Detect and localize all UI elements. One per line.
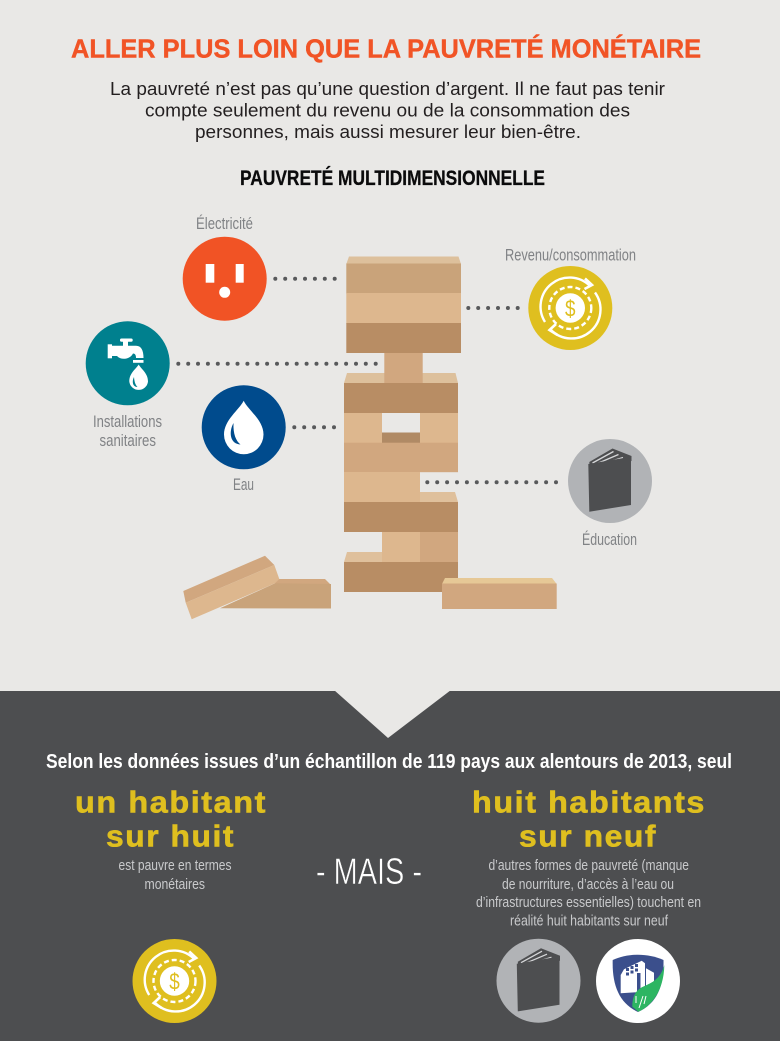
fallen blocks left [183,556,331,619]
icon: income bottom [132,939,216,1023]
icon: income: $ [565,296,576,322]
label: sanitation: Installations [93,413,162,431]
description: other poverty forms: réalité huit habitants sur neuf [510,912,669,930]
dotted connectors [176,277,558,484]
block tower [344,256,461,592]
big stat: eight in nine: sur neuf [519,818,657,854]
intro text: personnes, mais aussi mesurer leur bien-être. [195,122,581,142]
icon: income [528,266,612,350]
description: other poverty forms: d’infrastructures essentielles) touchent en [476,894,701,911]
big stat: one in eight [75,784,267,854]
icon: education book [568,439,652,523]
divider: mais: - MAIS - [316,851,422,892]
label: sanitation [93,413,162,450]
label: water: Eau [233,476,254,494]
description: other poverty forms: d’autres formes de pauvreté (manque [488,857,689,874]
title: ALLER PLUS LOIN QUE LA PAUVRETÉ MONÉTAIRE [71,34,701,64]
label: electricity: Électricité [196,214,253,233]
big stat: one in eight: sur huit [106,818,235,854]
description: other poverty forms [476,857,701,930]
label: income: Revenu/consommation [505,246,636,264]
intro text: compte seulement du revenu ou de la consommation des [145,100,630,120]
icon: water [202,385,286,469]
description: monetary poverty: est pauvre en termes [118,857,232,874]
description: monetary poverty [118,857,232,893]
icon: income bottom: $ [169,968,180,994]
heading: multidimensional poverty: PAUVRETÉ MULTIDIMENSIONNELLE [240,167,545,190]
intro text [110,79,665,142]
icon: sanitation tap [86,321,170,405]
big stat: one in eight: un habitant [75,784,267,820]
panel: dark summary [0,690,780,1041]
big stat: eight in nine: huit habitants [472,784,706,820]
description: monetary poverty: monétaires [144,876,205,893]
icon: education bottom [496,939,580,1023]
icon: electricity [183,237,267,321]
intro text: La pauvreté n’est pas qu’une question d’argent. Il ne faut pas tenir [110,79,665,99]
big stat: eight in nine [472,784,706,854]
icon: infrastructure shield [596,939,680,1023]
label: education: Éducation [582,530,637,549]
description: other poverty forms: de nourriture, d’accès à l’eau ou [502,876,674,893]
label: sanitation: sanitaires [100,432,156,450]
fallen block right [442,578,557,609]
